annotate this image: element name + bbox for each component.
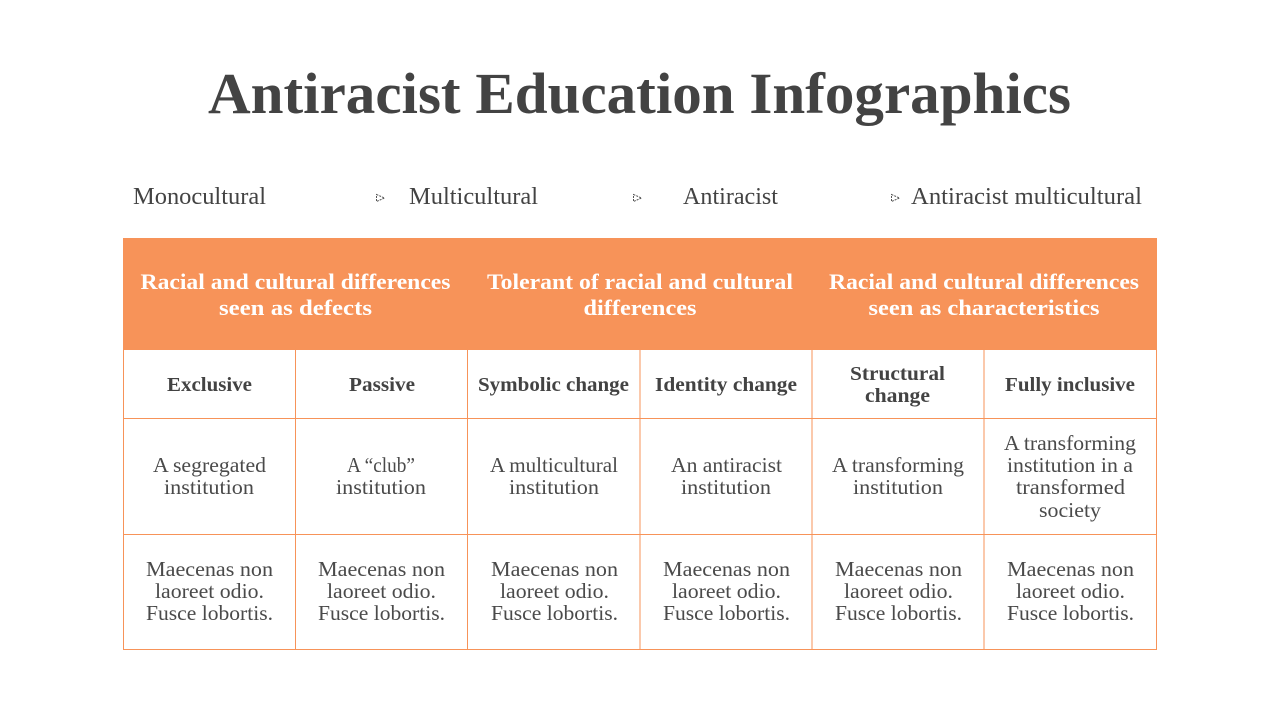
cell: transforming institution in a transformed society: society <box>1039 498 1102 522</box>
column heading: exclusive: Exclusive <box>167 374 252 396</box>
cell: description 1: laoreet odio. <box>155 579 264 603</box>
cell: description 3: Fusce lobortis. <box>491 601 618 625</box>
stage: antiracist: Antiracist <box>683 184 778 210</box>
header: tolerant <box>487 269 793 320</box>
cell: description 6 <box>1007 557 1135 625</box>
cell: description 5 <box>835 557 963 625</box>
header: seen as characteristics: Racial and cultural differences <box>829 269 1139 294</box>
column heading: passive: Passive <box>349 374 415 396</box>
arrow: antiracist to antiracist multicultural <box>892 194 900 202</box>
cell: description 3: laoreet odio. <box>500 579 609 603</box>
header: seen as defects: Racial and cultural differences <box>140 269 451 294</box>
cell: description 2: laoreet odio. <box>327 579 436 603</box>
arrow: monocultural to multicultural <box>376 194 384 202</box>
header band <box>124 239 1156 350</box>
cell: description 6: laoreet odio. <box>1016 579 1125 603</box>
cell: club institution: A “club” <box>347 453 415 477</box>
cell: transforming institution in a transformed society <box>1004 431 1137 522</box>
cell: multicultural institution: institution <box>509 475 600 499</box>
column heading: structural change: Structural <box>850 363 945 385</box>
cell: description 5: Maecenas non <box>835 557 963 581</box>
column heading: structural change: change <box>865 385 930 407</box>
stage sequence <box>133 184 1142 210</box>
stage: multicultural: Multicultural <box>409 184 538 210</box>
column heading: symbolic change: Symbolic change <box>478 374 629 396</box>
header: seen as defects <box>140 269 451 320</box>
cell: description 6: Fusce lobortis. <box>1007 601 1134 625</box>
cell: segregated institution <box>153 453 267 499</box>
column heading: fully inclusive: Fully inclusive <box>1005 374 1135 396</box>
header: seen as characteristics <box>829 269 1139 320</box>
cell: description 4: laoreet odio. <box>672 579 781 603</box>
cell: transforming institution in a transformed society: A transforming <box>1004 431 1137 455</box>
cell: description 4: Fusce lobortis. <box>663 601 790 625</box>
cell: description 1: Fusce lobortis. <box>146 601 273 625</box>
table <box>124 238 1157 650</box>
cell: transforming institution: A transforming <box>832 453 965 477</box>
cell: description 1: Maecenas non <box>146 557 274 581</box>
cell: description 4 <box>663 557 791 625</box>
cell: antiracist institution <box>671 453 782 499</box>
cell: description 1 <box>146 557 274 625</box>
header: tolerant: differences <box>584 295 697 320</box>
header: tolerant: Tolerant of racial and cultural <box>487 269 793 294</box>
title: Antiracist Education Infographics <box>208 61 1071 126</box>
cell: description 5: laoreet odio. <box>844 579 953 603</box>
cell: multicultural institution <box>490 453 618 499</box>
cell: multicultural institution: A multicultural <box>490 453 618 477</box>
cell: antiracist institution: institution <box>681 475 772 499</box>
cell: description 2: Fusce lobortis. <box>318 601 445 625</box>
column heading: structural change <box>850 363 945 407</box>
cell: description 6: Maecenas non <box>1007 557 1135 581</box>
cell: description 3 <box>491 557 619 625</box>
cell: transforming institution in a transformed society: transformed <box>1016 475 1126 499</box>
cell: segregated institution: A segregated <box>153 453 267 477</box>
cell: description 3: Maecenas non <box>491 557 619 581</box>
cell: description 2 <box>318 557 446 625</box>
cell: transforming institution in a transformed society: institution in a <box>1007 453 1134 477</box>
cell: antiracist institution: An antiracist <box>671 453 782 477</box>
cell: club institution <box>336 453 427 499</box>
cell: club institution: institution <box>336 475 427 499</box>
column heading: identity change: Identity change <box>655 374 797 396</box>
cell: segregated institution: institution <box>164 475 255 499</box>
stage: monocultural: Monocultural <box>133 184 266 210</box>
cell: transforming institution <box>832 453 965 499</box>
header: seen as defects: seen as defects <box>219 295 372 320</box>
cell: transforming institution: institution <box>853 475 944 499</box>
header: seen as characteristics: seen as characteristics <box>868 295 1100 320</box>
arrow: multicultural to antiracist <box>634 194 642 202</box>
cell: description 4: Maecenas non <box>663 557 791 581</box>
stage: antiracist multicultural: Antiracist multicultural <box>911 184 1142 210</box>
cell: description 2: Maecenas non <box>318 557 446 581</box>
cell: description 5: Fusce lobortis. <box>835 601 962 625</box>
